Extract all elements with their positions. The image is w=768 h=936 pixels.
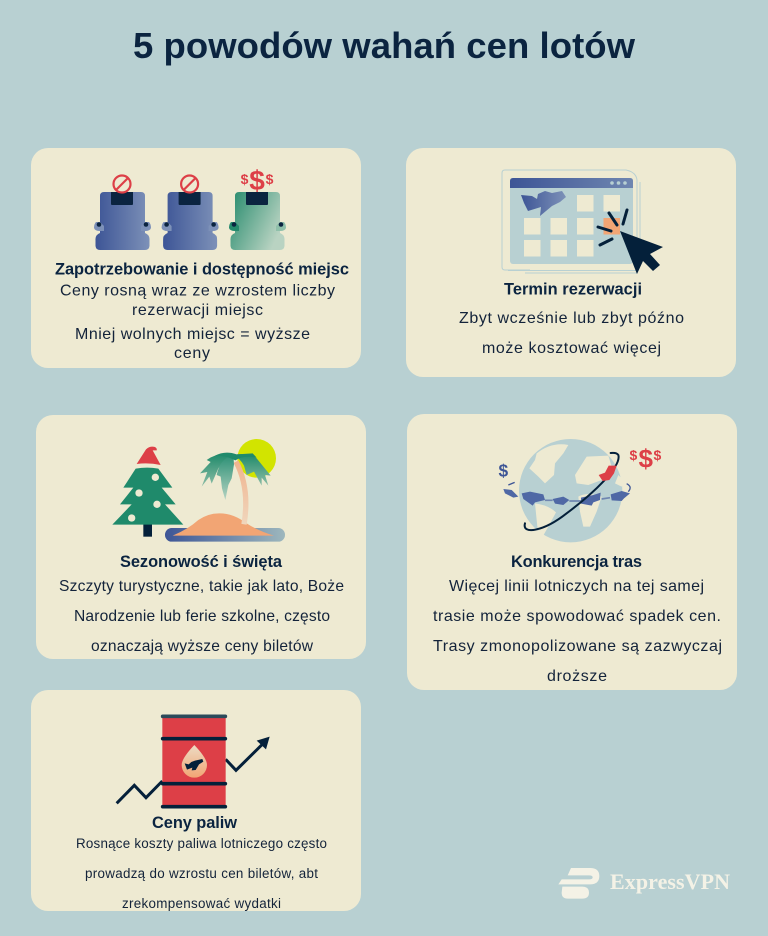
text block: Zbyt wcześnie lub zbyt późno [459, 310, 684, 327]
text block: może kosztować więcej [482, 340, 661, 357]
text block: rezerwacji miejsc [132, 302, 263, 319]
icon: globe with routes [499, 439, 661, 542]
icon: cursor arrow [620, 231, 663, 274]
icon: globe with routes: $ [638, 444, 653, 474]
icon: plane [521, 191, 566, 216]
icon: expensive green seat: $ [266, 171, 274, 187]
text block: zrekompensować wydatki [122, 896, 281, 911]
icon: blue planes route [503, 489, 630, 506]
palm fronds [200, 453, 271, 500]
icon: calendar and cursor [502, 170, 663, 274]
text block: droższe [547, 668, 607, 685]
text block: Trasy zmonopolizowane są zazwyczaj [433, 638, 722, 655]
text block: Mniej wolnych miejsc = wyższe [75, 326, 310, 343]
icon: christmas tree and palm island [112, 439, 285, 542]
heading: Sezonowość i święta [120, 553, 283, 571]
icon: red plane [599, 466, 617, 481]
heading: Ceny paliw [152, 814, 237, 832]
icon: expensive green seat: $ [249, 165, 265, 196]
icon: dollar signs: $ [499, 461, 509, 481]
text block: Więcej linii lotniczych na tej samej [449, 578, 704, 595]
text block: Szczyty turystyczne, takie jak lato, Boże [59, 578, 344, 595]
text block: ceny [174, 345, 210, 362]
text block: prowadzą do wzrostu cen biletów, abt [85, 866, 318, 881]
orbit line [525, 453, 619, 530]
heading: Termin rezerwacji [504, 280, 642, 298]
icon: palm island [165, 439, 285, 542]
text block [433, 578, 722, 685]
panel: route competition [407, 414, 737, 690]
icon: oil barrel and rising chart [117, 716, 270, 807]
text block [59, 578, 344, 655]
barrel [162, 716, 226, 807]
logo: ExpressVPN [558, 868, 730, 899]
panel: fuel prices [31, 690, 361, 911]
text block [60, 282, 335, 362]
text block [459, 310, 684, 357]
logo: ExpressVPN: ExpressVPN [610, 869, 730, 894]
panel: seat demand and availability [31, 148, 361, 368]
chart arrow [117, 737, 270, 803]
heading: Zapotrzebowanie i dostępność miejsc [55, 260, 349, 278]
text block: Ceny rosną wraz ze wzrostem liczby [60, 282, 335, 300]
icon: click marks [598, 210, 627, 245]
text block [76, 836, 327, 911]
text block: Rosnące koszty paliwa lotniczego często [76, 836, 327, 851]
icon: ExpressVPN mark [558, 868, 599, 899]
icon: globe with routes: $ [629, 447, 637, 463]
title: 5 powodów wahań cen lotów [133, 25, 636, 66]
icon: globe with routes: $ [653, 447, 661, 463]
panel: seasonality and holidays [36, 415, 366, 659]
icon: unavailable seat 1 [94, 176, 151, 250]
panel: booking time [406, 148, 736, 377]
globe [519, 439, 625, 542]
text block: Narodzenie lub ferie szkolne, często [74, 608, 330, 625]
icon: expensive green seat [229, 165, 286, 250]
icon: three seats with price signs [94, 165, 286, 250]
icon: unavailable seat 2 [162, 176, 219, 250]
text block: trasie może spowodować spadek cen. [433, 608, 721, 625]
text block: oznaczają wyższe ceny biletów [91, 638, 314, 655]
heading: Konkurencja tras [511, 553, 642, 571]
icon: christmas tree [112, 447, 183, 537]
icon: expensive green seat: $ [241, 171, 249, 187]
